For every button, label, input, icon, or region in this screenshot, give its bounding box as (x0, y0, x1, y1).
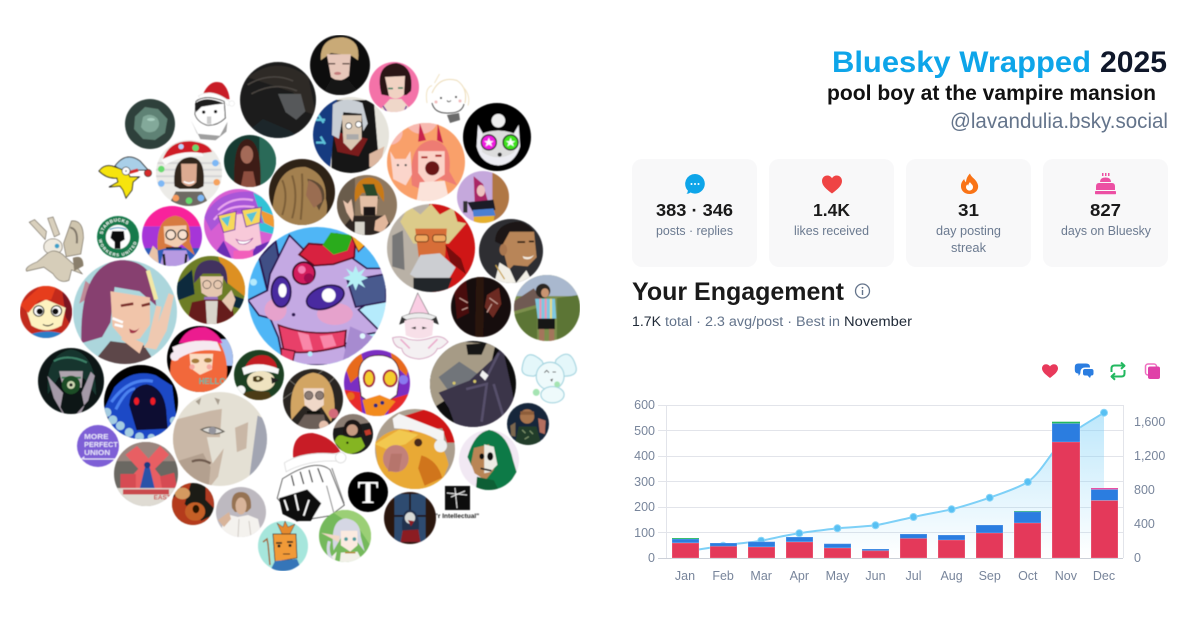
avatar: girl with glasses and pride flag (142, 206, 202, 266)
bar: May (824, 544, 851, 558)
title: Bluesky Wrapped 2025: Bluesky Wrapped (832, 46, 1091, 79)
avatar: pink-haired girl on lilac (457, 171, 509, 223)
left axis labels: 300 (634, 475, 655, 489)
icon: flame (961, 174, 978, 194)
engagement summary: 1.7K (632, 314, 661, 329)
avatar: workers union logo: STARBUCKS (99, 217, 130, 235)
month labels: Nov (1055, 569, 1078, 583)
stat: posts and replies count: 383 · 346 (656, 200, 733, 220)
avatar: colourful skull creature (344, 350, 410, 416)
avatar: dark wolf in cloak (430, 341, 516, 427)
month labels: Jan (675, 569, 695, 583)
bar: Mar (748, 542, 775, 558)
label: posts and replies: posts · replies (656, 223, 733, 238)
avatar: pink-haired anime with cat (386, 122, 466, 202)
avatar: More Perfect Union logo: PERFECT (84, 441, 118, 449)
month labels: Apr (790, 569, 809, 583)
handle: @lavandulia.bsky.social (950, 110, 1168, 133)
icon: info (856, 284, 870, 298)
bar: Aug (938, 535, 965, 558)
avatar: dark-haired figure (240, 62, 316, 138)
bar: Dec (1091, 488, 1118, 558)
right axis labels: 1,200 (1134, 449, 1165, 463)
avatar: person hugging green plush (333, 414, 373, 454)
right axis labels (1134, 415, 1165, 565)
avatar: workers union logo (96, 215, 140, 259)
heading: Your Engagement: Your Engagement (632, 278, 845, 306)
avatar: blonde girl with round glasses (283, 369, 343, 430)
stat: likes count: 1.4K (813, 200, 850, 220)
avatar: orange and dark blurred photo (172, 483, 214, 525)
right axis labels: 400 (1134, 517, 1155, 531)
left axis labels: 600 (634, 398, 655, 412)
avatar: person in front of large red letters (114, 442, 178, 506)
avatar: muted green texture (125, 99, 175, 149)
right axis labels: 0 (1134, 551, 1141, 565)
icon: quotes squares (1146, 364, 1160, 379)
avatar: selfie with orange and green hair (337, 175, 397, 235)
bar: Jun (862, 549, 889, 558)
bar chart: monthly engagement (634, 398, 1165, 583)
avatar: dark green haired girl with orb (38, 348, 104, 414)
label: likes received: likes received (794, 223, 869, 238)
label: days on Bluesky: days on Bluesky (1061, 223, 1151, 238)
avatar: pink hat white cat (393, 293, 448, 359)
avatar: spiky blond man with red coat (387, 204, 475, 292)
month labels: Oct (1018, 569, 1038, 583)
engagement summary: November (844, 314, 913, 329)
right axis labels: 800 (1134, 483, 1155, 497)
cumulative area (685, 413, 1104, 558)
panel: posting streak (906, 159, 1031, 267)
cumulative line (685, 413, 1104, 552)
avatar: black cat with star glasses (463, 103, 531, 171)
cumulative points (720, 409, 1108, 549)
bar: Sep (976, 525, 1003, 558)
avatar: yellow bird with blue nightcap (99, 157, 152, 198)
month labels (675, 569, 1115, 583)
icon: repost arrows (1112, 362, 1124, 380)
avatar: raccoon with santa hat (234, 350, 284, 400)
bar: Feb (710, 543, 737, 558)
avatar: black and white character in santa hat (191, 82, 234, 140)
stacked bars (672, 422, 1118, 558)
avatar: vampire at window (384, 492, 436, 544)
avatar: intellectual logo: "r Intellectual" (435, 513, 479, 520)
right axis labels: 1,600 (1134, 415, 1165, 429)
avatar: moth creature (26, 217, 83, 281)
icon: likes heart (1042, 364, 1058, 378)
avatar: pale blue bunny (522, 354, 576, 403)
avatar: purple hair and rainbow glasses (204, 189, 274, 259)
avatar: long wavy blonde hair portrait (269, 159, 335, 225)
avatar: purple-haired woman waving (73, 260, 177, 364)
avatar: silver-haired elf (319, 510, 371, 562)
grid lines (658, 405, 1124, 558)
avatar: intellectual logo (435, 486, 479, 520)
avatar: workers union logo: WORKERS UNITED (98, 238, 138, 258)
avatar: woman in white shirt (216, 487, 266, 537)
left axis labels: 400 (634, 449, 655, 463)
left axis labels: 500 (634, 424, 655, 438)
avatar: dark red patterned image (451, 277, 511, 337)
icon: birthday cake (1095, 173, 1116, 194)
left axis labels: 100 (634, 526, 655, 540)
label: day posting streak: streak (951, 240, 986, 255)
avatar: orange-haired girl in pink santa hat: HELLO (199, 377, 225, 386)
icon: heart (822, 176, 842, 194)
bar: Apr (786, 537, 813, 558)
stat: days on Bluesky count: 827 (1090, 200, 1121, 220)
avatar: blue hooded figure with red eyes (103, 365, 178, 441)
month labels: Feb (712, 569, 734, 583)
engagement summary (632, 314, 913, 329)
avatar: dark-haired woman against green (224, 135, 276, 187)
avatar: More Perfect Union logo: MORE (84, 433, 109, 441)
stat: streak days: 31 (958, 200, 979, 220)
avatar: main purple creature (248, 227, 386, 365)
label: day posting streak: day posting (936, 223, 1001, 238)
avatar: red-haired cartoon fox (20, 286, 72, 338)
label: day posting streak (936, 223, 1001, 255)
avatar: man with lights and santa hat (156, 140, 222, 206)
avatar: pale line-art sketch (426, 74, 469, 123)
month labels: Aug (940, 569, 963, 583)
avatar: blond portrait (310, 35, 370, 95)
chart legend (1042, 362, 1160, 380)
avatar: black and white character in santa hat, large (277, 433, 346, 521)
bar: Oct (1014, 511, 1041, 558)
avatar: More Perfect Union logo: UNION (84, 449, 110, 457)
avatar: smiling man portrait (479, 219, 543, 283)
subtitle: display name: pool boy at the vampire mansion (827, 82, 1156, 105)
avatar: dark-haired woman on pink (369, 62, 419, 112)
avatar cluster (20, 35, 580, 571)
month labels: Mar (750, 569, 772, 583)
month labels: Dec (1093, 569, 1115, 583)
panel: posts and replies (632, 159, 757, 267)
month labels: Sep (979, 569, 1001, 583)
engagement summary: total · 2.3 avg/post · Best in (665, 314, 840, 329)
month labels: Jun (865, 569, 886, 583)
avatar: person outdoors in striped shirt (514, 275, 580, 341)
avatar: More Perfect Union logo (77, 425, 119, 467)
avatar: orange-haired girl in pink santa hat (167, 326, 233, 392)
icon: replies bubbles (1075, 364, 1094, 378)
panel: days on Bluesky (1043, 159, 1168, 267)
avatar: NYT logo: T (358, 475, 379, 510)
icon: speech bubble (685, 174, 705, 194)
bar: Nov (1052, 422, 1080, 558)
avatar: purple-haired character with red jacket (177, 256, 245, 324)
title: Bluesky Wrapped 2025: 2025 (1100, 46, 1167, 79)
avatar: cockatiel in santa hat (375, 409, 455, 489)
left axis labels: 200 (634, 500, 655, 514)
avatar: pixel carrot character (258, 521, 308, 571)
avatar: white-haired manga character (313, 97, 389, 173)
avatar: skull-faced man in green hood (459, 430, 519, 490)
avatar: pale-faced white-haired portrait (173, 392, 267, 486)
bar: Jul (900, 534, 927, 558)
left axis labels (634, 398, 655, 565)
month labels: Jul (906, 569, 921, 583)
avatar: tattooed man in dark shirt (507, 403, 549, 445)
bar: Jan (672, 538, 699, 558)
month labels: May (826, 569, 850, 583)
panel: likes received (769, 159, 894, 267)
avatar: person in front of large red letters: EAST (154, 495, 171, 502)
left axis labels: 0 (648, 551, 655, 565)
avatar: NYT logo (348, 472, 388, 512)
